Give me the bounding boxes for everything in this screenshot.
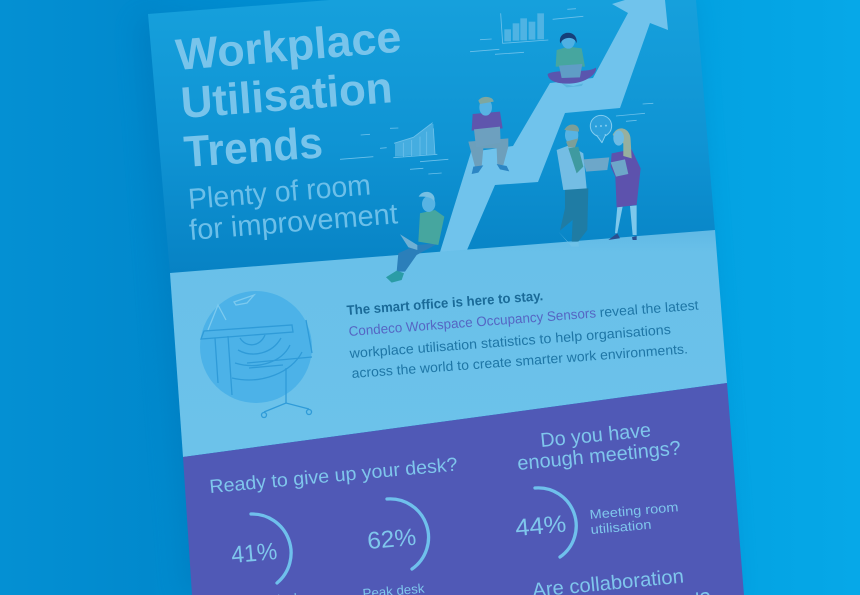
heading: meetings (516, 419, 682, 475)
person: middle, sitting (468, 97, 509, 174)
stat: 41%: 41% (230, 538, 278, 569)
title: Trends (182, 118, 324, 177)
text block: intro: workplace utilisation statistics to help organisations (348, 322, 672, 361)
stat: 44% (514, 488, 679, 557)
illustration: people (386, 33, 641, 283)
person: man standing (557, 125, 609, 247)
heading: desk: Ready to give up your desk? (209, 454, 458, 498)
text block: intro: Condeco Workspace Occupancy Sensors (348, 305, 597, 339)
icon: speech bubble (590, 115, 612, 143)
heading: meetings: Do you have (539, 419, 652, 452)
title: Utilisation (179, 63, 394, 128)
sheet shadow (138, 0, 735, 595)
text block: intro (346, 288, 699, 381)
title: Workplace (174, 13, 403, 80)
stat: 62% (362, 499, 429, 595)
panel: header (148, 0, 715, 273)
heading: meetings: enough meetings? (516, 437, 682, 475)
chart: bars (470, 9, 653, 121)
subtitle (187, 169, 399, 247)
chart: line and bars (340, 123, 448, 174)
illustration: desk sensor (200, 291, 312, 418)
stat: 44%: Meeting room (589, 499, 679, 522)
subtitle: Plenty of room (187, 169, 372, 216)
text block: intro: across the world to create smarter work environments. (351, 341, 688, 381)
stat: 41% (221, 514, 302, 595)
stat: 44%: 44% (514, 511, 567, 542)
stat: 44%: utilisation (590, 517, 652, 537)
person: top, cross-legged (548, 33, 596, 87)
stat: 62%: 62% (366, 524, 417, 555)
person: woman standing (608, 128, 641, 240)
panel: purple stats (183, 383, 744, 595)
subtitle: for improvement (188, 198, 399, 247)
person: lower left, on arrow foot (386, 192, 444, 283)
text block: intro: reveal the latest (599, 298, 699, 320)
arrow (440, 0, 668, 252)
text block: intro: The smart office is here to stay. (346, 288, 544, 318)
title (174, 13, 403, 177)
panel: intro band (170, 230, 727, 457)
